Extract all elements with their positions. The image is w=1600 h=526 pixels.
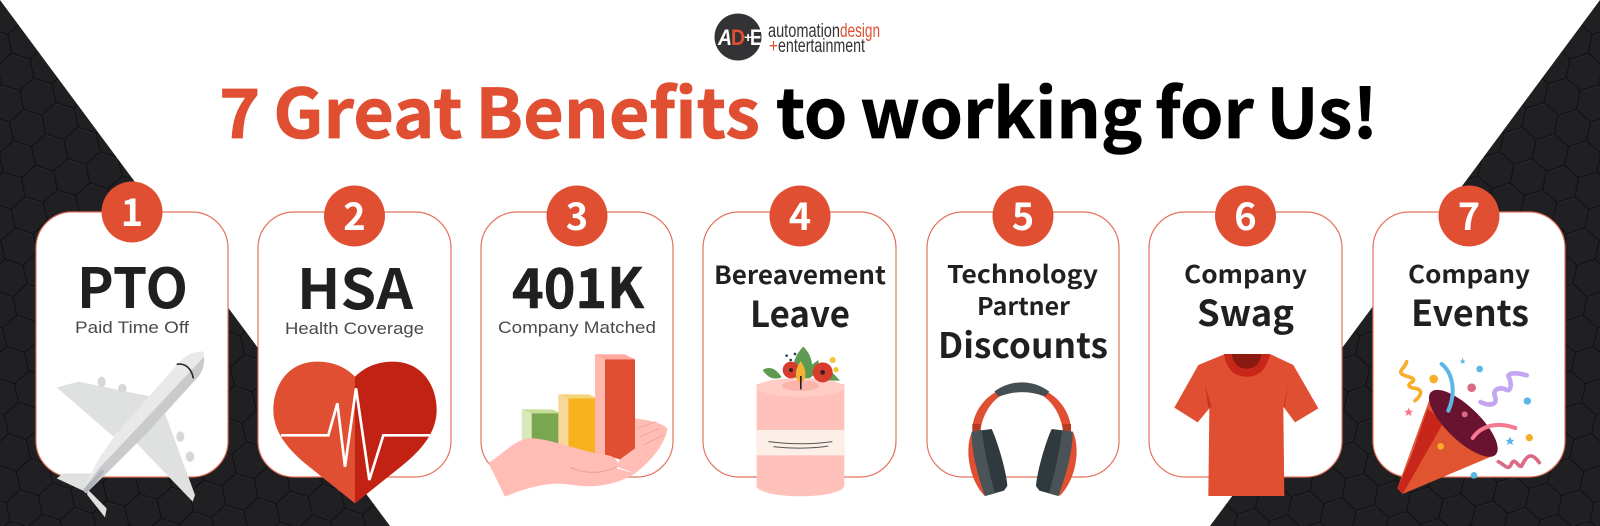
heading Swag: Swag bbox=[1197, 285, 1294, 337]
number badge 6 bbox=[1215, 186, 1276, 246]
logo: entertainment bbox=[778, 36, 866, 57]
heading Discounts: Discounts bbox=[938, 318, 1108, 369]
background: left hexagon triangle bbox=[0, 0, 390, 526]
number badge 5: 5 bbox=[1012, 186, 1034, 241]
heading Company: Company bbox=[1408, 256, 1530, 291]
number badge 3 bbox=[546, 186, 608, 246]
logo: E bbox=[750, 25, 762, 50]
icon: heart bbox=[273, 362, 437, 503]
heading Technology: Technology bbox=[947, 256, 1098, 291]
panel: 3 401K bbox=[481, 186, 673, 497]
icon: headphones bbox=[968, 382, 1077, 496]
logo: automation bbox=[768, 21, 840, 42]
title bbox=[219, 59, 1378, 158]
icon: party popper bbox=[1397, 358, 1539, 494]
panel: 1 PTO bbox=[36, 182, 228, 517]
number badge 2 bbox=[324, 186, 385, 246]
logo: + bbox=[744, 29, 752, 45]
heading HSA: HSA bbox=[297, 245, 414, 325]
logo bbox=[714, 14, 880, 60]
panel: 4 Bereavement Leave bbox=[703, 186, 896, 496]
heading PTO: PTO bbox=[77, 244, 188, 324]
icon: airplane bbox=[57, 352, 204, 517]
panel: 7 Company Events bbox=[1373, 186, 1565, 494]
number badge 3: 3 bbox=[566, 186, 588, 241]
heading Company: Company bbox=[1184, 256, 1307, 291]
subheading: Company Matched bbox=[498, 318, 656, 337]
number badge 1 bbox=[102, 182, 162, 242]
panel: 5 Technology Partner Discounts bbox=[927, 186, 1119, 496]
heading Partner: Partner bbox=[977, 288, 1070, 323]
number badge 5 bbox=[992, 186, 1054, 246]
number badge 4 bbox=[770, 186, 830, 246]
heading Events: Events bbox=[1411, 285, 1529, 337]
number badge 4: 4 bbox=[789, 186, 811, 241]
number badge 7: 7 bbox=[1458, 186, 1480, 241]
number badge 6: 6 bbox=[1234, 186, 1257, 241]
heading Leave: Leave bbox=[750, 286, 850, 338]
logo: design bbox=[840, 21, 880, 42]
background: right hexagon triangle bbox=[1210, 0, 1600, 526]
logo: A bbox=[717, 25, 732, 50]
number badge 7 bbox=[1438, 186, 1500, 246]
panel: 2 HSA bbox=[258, 186, 451, 503]
logo: D bbox=[731, 25, 745, 50]
heading Bereavement: Bereavement bbox=[714, 256, 886, 292]
heading 401K: 401K bbox=[512, 244, 644, 324]
icon: t-shirt bbox=[1174, 354, 1318, 496]
icon: candle with flowers bbox=[756, 347, 844, 496]
panel: 6 Company Swag bbox=[1149, 186, 1342, 496]
logo: + bbox=[769, 36, 778, 57]
number badge 1: 1 bbox=[121, 182, 143, 237]
icon: hand holding bar chart bbox=[488, 354, 667, 497]
subheading: Health Coverage bbox=[285, 319, 424, 338]
title: 7 Great Benefits bbox=[219, 59, 760, 158]
subheading: Paid Time Off bbox=[75, 318, 189, 337]
number badge 2: 2 bbox=[343, 186, 366, 241]
title: to working for Us! bbox=[776, 59, 1378, 158]
